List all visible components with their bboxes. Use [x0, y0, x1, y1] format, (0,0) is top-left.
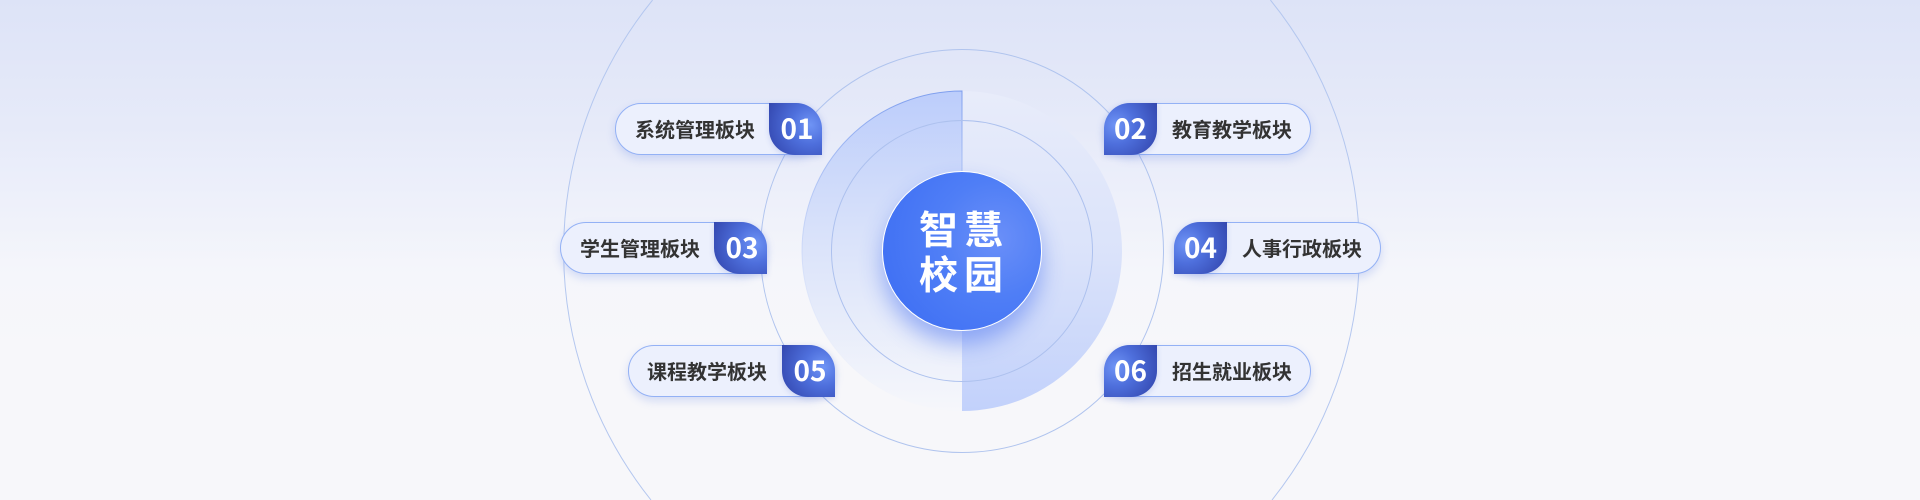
module 01: 系统管理板块: [635, 114, 755, 143]
module 02: 教育教学板块: [1172, 114, 1292, 143]
module 06: 招生就业板块: [1172, 356, 1292, 385]
middle ring: [760, 50, 1164, 452]
fan edge: [802, 91, 962, 411]
module 06: [1104, 345, 1311, 397]
module 04: [1174, 222, 1381, 274]
left fan: [802, 91, 962, 411]
module 04: 人事行政板块: [1242, 233, 1362, 262]
module 02: 02: [1114, 108, 1147, 148]
module 05: [628, 345, 835, 397]
inner ring: [832, 120, 1092, 382]
module 04: 04: [1184, 227, 1217, 267]
module 01: [615, 103, 822, 155]
central hub: [882, 171, 1042, 331]
outer ring: [564, 0, 1359, 500]
module 05: 课程教学板块: [647, 356, 767, 385]
hub title line one: 智慧: [919, 200, 1009, 256]
module 01: 01: [780, 108, 814, 148]
module 05: 05: [793, 350, 827, 390]
module 06: 06: [1114, 350, 1147, 390]
right fan: [962, 91, 1122, 411]
module 03: [560, 222, 767, 274]
module 02: [1104, 103, 1311, 155]
module 03: 学生管理板块: [580, 233, 700, 262]
hub title line two: 校园: [919, 245, 1009, 301]
module 03: 03: [725, 227, 759, 267]
